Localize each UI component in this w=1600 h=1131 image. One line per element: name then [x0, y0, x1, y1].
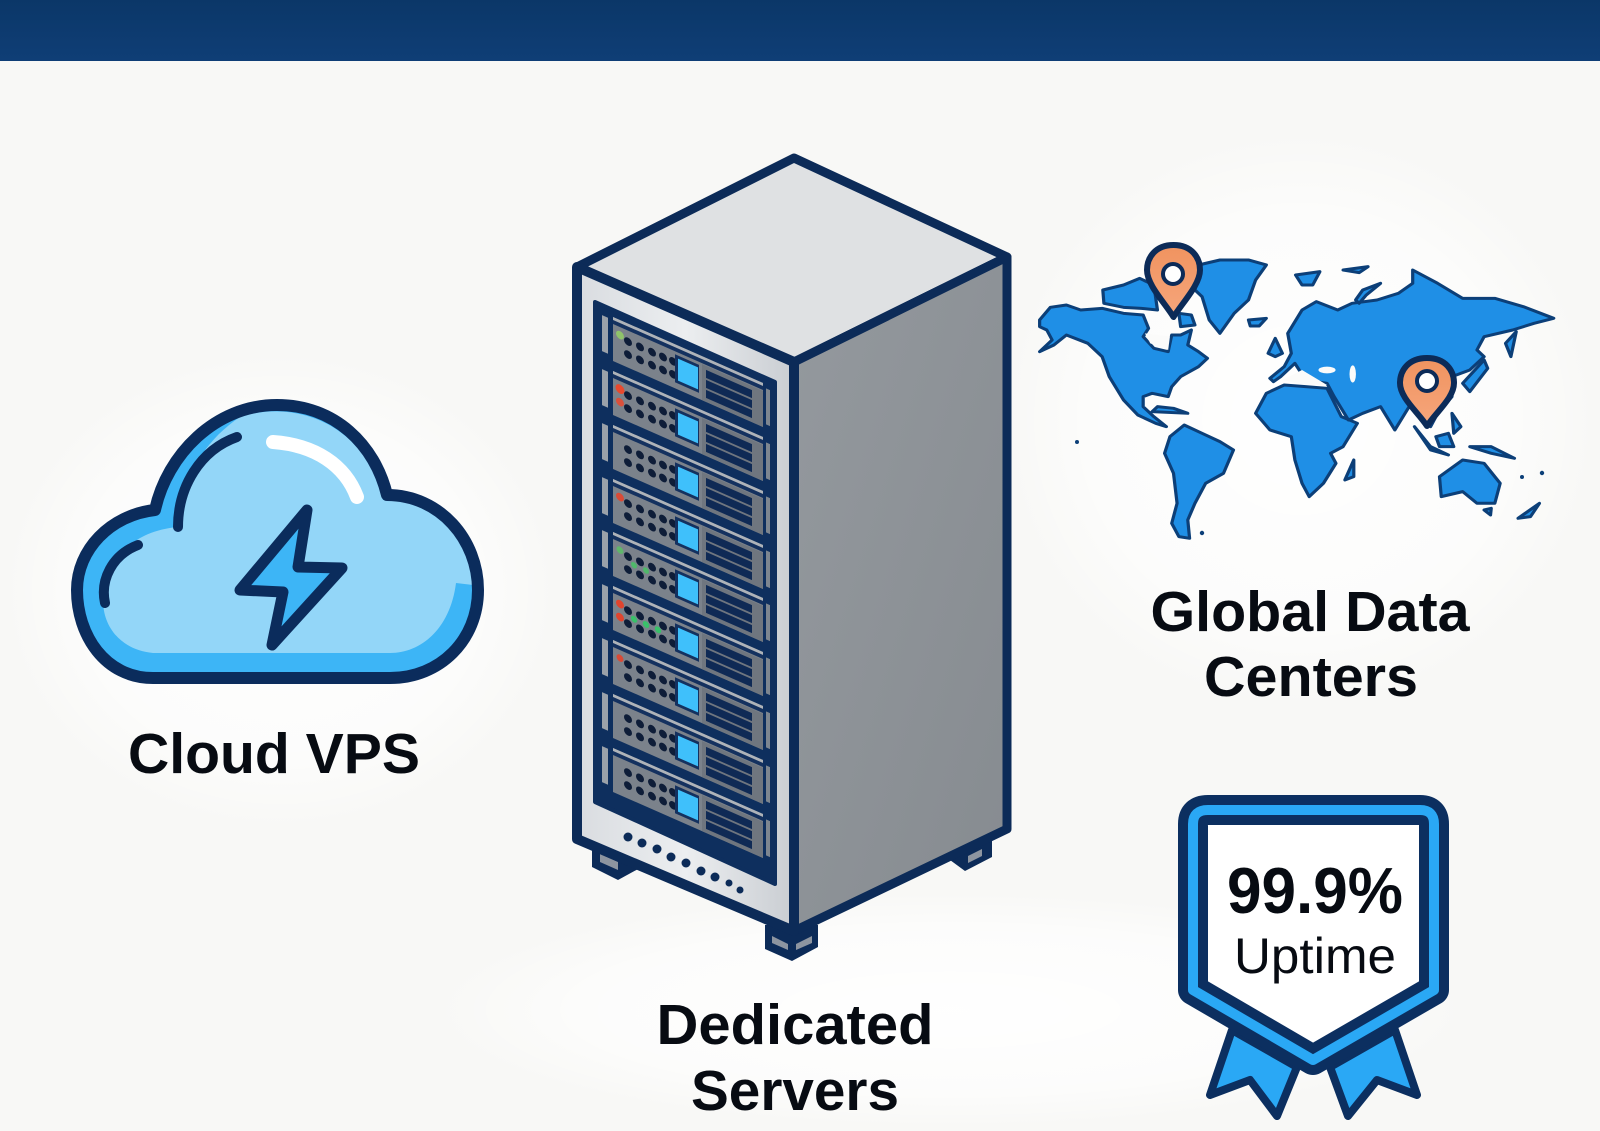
server unit 8 — [602, 689, 770, 807]
pin: Asia — [1400, 358, 1454, 426]
background glow: map area — [1002, 130, 1598, 710]
label: Global Data Centers: Centers — [1204, 645, 1418, 709]
label: Global Data Centers: Global Data — [1150, 580, 1471, 644]
rack side face — [794, 257, 1007, 931]
rack feet — [592, 835, 992, 961]
background glow: cloud area — [2, 350, 558, 830]
server unit 7 — [602, 635, 770, 753]
rack bay — [595, 302, 775, 884]
map lakes and inland seas — [1145, 333, 1356, 385]
server unit 9 — [602, 743, 770, 861]
badge ribbons — [1210, 1030, 1417, 1116]
map dots — [1075, 440, 1544, 535]
label: Dedicated Servers: Dedicated — [656, 993, 934, 1057]
label: Cloud VPS: Cloud VPS — [128, 722, 420, 786]
icon: server rack — [577, 158, 1007, 961]
rack top face — [577, 158, 1007, 362]
label: Dedicated Servers — [656, 993, 934, 1123]
icon: cloud with lightning bolt — [77, 405, 478, 678]
badge shield — [1193, 810, 1434, 1060]
server unit 2 — [602, 366, 770, 484]
rack front frame — [577, 267, 794, 931]
server unit 5 — [602, 527, 770, 645]
map continents — [1040, 260, 1554, 538]
label: Global Data Centers — [1150, 580, 1471, 709]
server unit 6 — [602, 581, 770, 699]
icon: world map with pins — [1040, 245, 1554, 538]
badge value: 99.9% — [1227, 854, 1403, 927]
header band — [0, 0, 1600, 61]
badge: 99.9% uptime — [1193, 810, 1434, 1116]
rack status dots — [624, 832, 744, 894]
background glow: lower area — [430, 892, 1470, 1128]
server unit 4 — [602, 474, 770, 592]
label: Dedicated Servers: Servers — [691, 1059, 899, 1123]
server unit 1 — [602, 312, 770, 430]
server unit 3 — [602, 420, 770, 538]
pin: North America — [1147, 245, 1200, 317]
badge caption: Uptime — [1234, 928, 1396, 984]
